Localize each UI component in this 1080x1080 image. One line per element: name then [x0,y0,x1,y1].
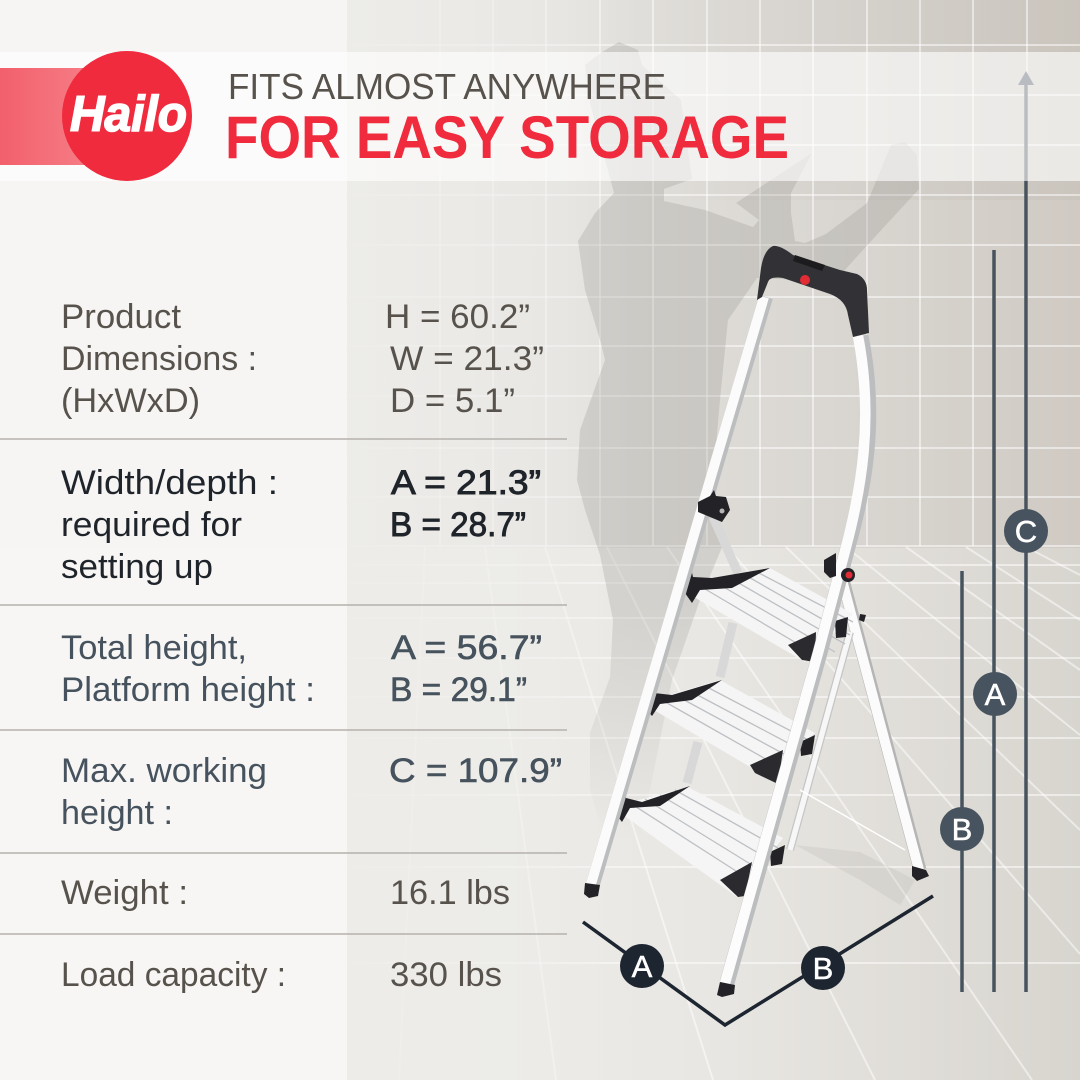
spec: total and platform height: Total height, [61,629,247,667]
spec: product dimensions: H = 60.2” [385,298,530,336]
spec: max working height: C = 107.9” [389,752,562,790]
Hailo logo [62,51,192,181]
floor dimension lines A and B: A [632,949,653,984]
height line A: A [985,677,1006,712]
header band [0,52,1080,181]
step 1 [680,568,853,662]
spec: weight: Weight : [61,874,188,912]
spec: product dimensions: (HxWxD) [61,382,200,420]
back rail [591,297,766,884]
spec: max working height [61,752,562,832]
Hailo logo: Hailo [70,86,187,142]
title: FITS ALMOST ANYWHERE [228,66,666,107]
floor dimension lines A and B [583,896,933,1025]
height marker C [1004,509,1048,553]
height marker C: C [1015,514,1037,549]
spec: width and depth: required for [61,506,242,544]
spec: width and depth: A = 21.3” [391,464,541,502]
spec: total and platform height: A = 56.7” [391,629,542,667]
title: FOR EASY STORAGE [225,104,789,171]
spec: max working height: height : [61,794,173,832]
step 3 [611,786,785,897]
height line B: B [952,812,972,847]
inner step supports [687,517,738,783]
spec: total and platform height [61,629,542,709]
step ladder illustration [584,246,929,997]
spec: max working height: Max. working [61,752,267,790]
height line A [973,250,1017,992]
spec: load capacity: 330 lbs [390,956,502,994]
black top handle [757,246,869,337]
spec: total and platform height: B = 29.1” [390,671,527,709]
black hinges and red knob [698,490,866,622]
rear leg and brace [790,580,920,870]
spec: width and depth [61,464,541,586]
spec: weight: 16.1 lbs [390,874,510,912]
spec: total and platform height: Platform height : [61,671,315,709]
height line B [940,571,984,992]
front rail with curved handle [725,336,869,983]
spec: width and depth: Width/depth : [61,464,278,502]
spec: product dimensions: Dimensions : [61,340,257,378]
height line C with arrow [1018,71,1034,992]
spec: weight [61,874,510,912]
logo ribbon [0,68,90,165]
spec: product dimensions: Product [61,298,182,336]
spec: width and depth: B = 28.7” [390,506,526,544]
spec: product dimensions: W = 21.3” [390,340,544,378]
left text panel [0,0,347,1080]
spec row dividers [0,439,567,934]
floor dimension lines A and B: B [813,951,833,986]
title [225,66,789,171]
spec: product dimensions [61,298,544,420]
rubber feet [584,866,929,997]
floor shadow [795,845,915,905]
step 2 [641,680,815,784]
spec: width and depth: setting up [61,548,213,586]
spec: load capacity: Load capacity : [61,956,286,994]
spec: product dimensions: D = 5.1” [390,382,515,420]
spec: load capacity [61,956,502,994]
silhouette of person [577,42,919,840]
